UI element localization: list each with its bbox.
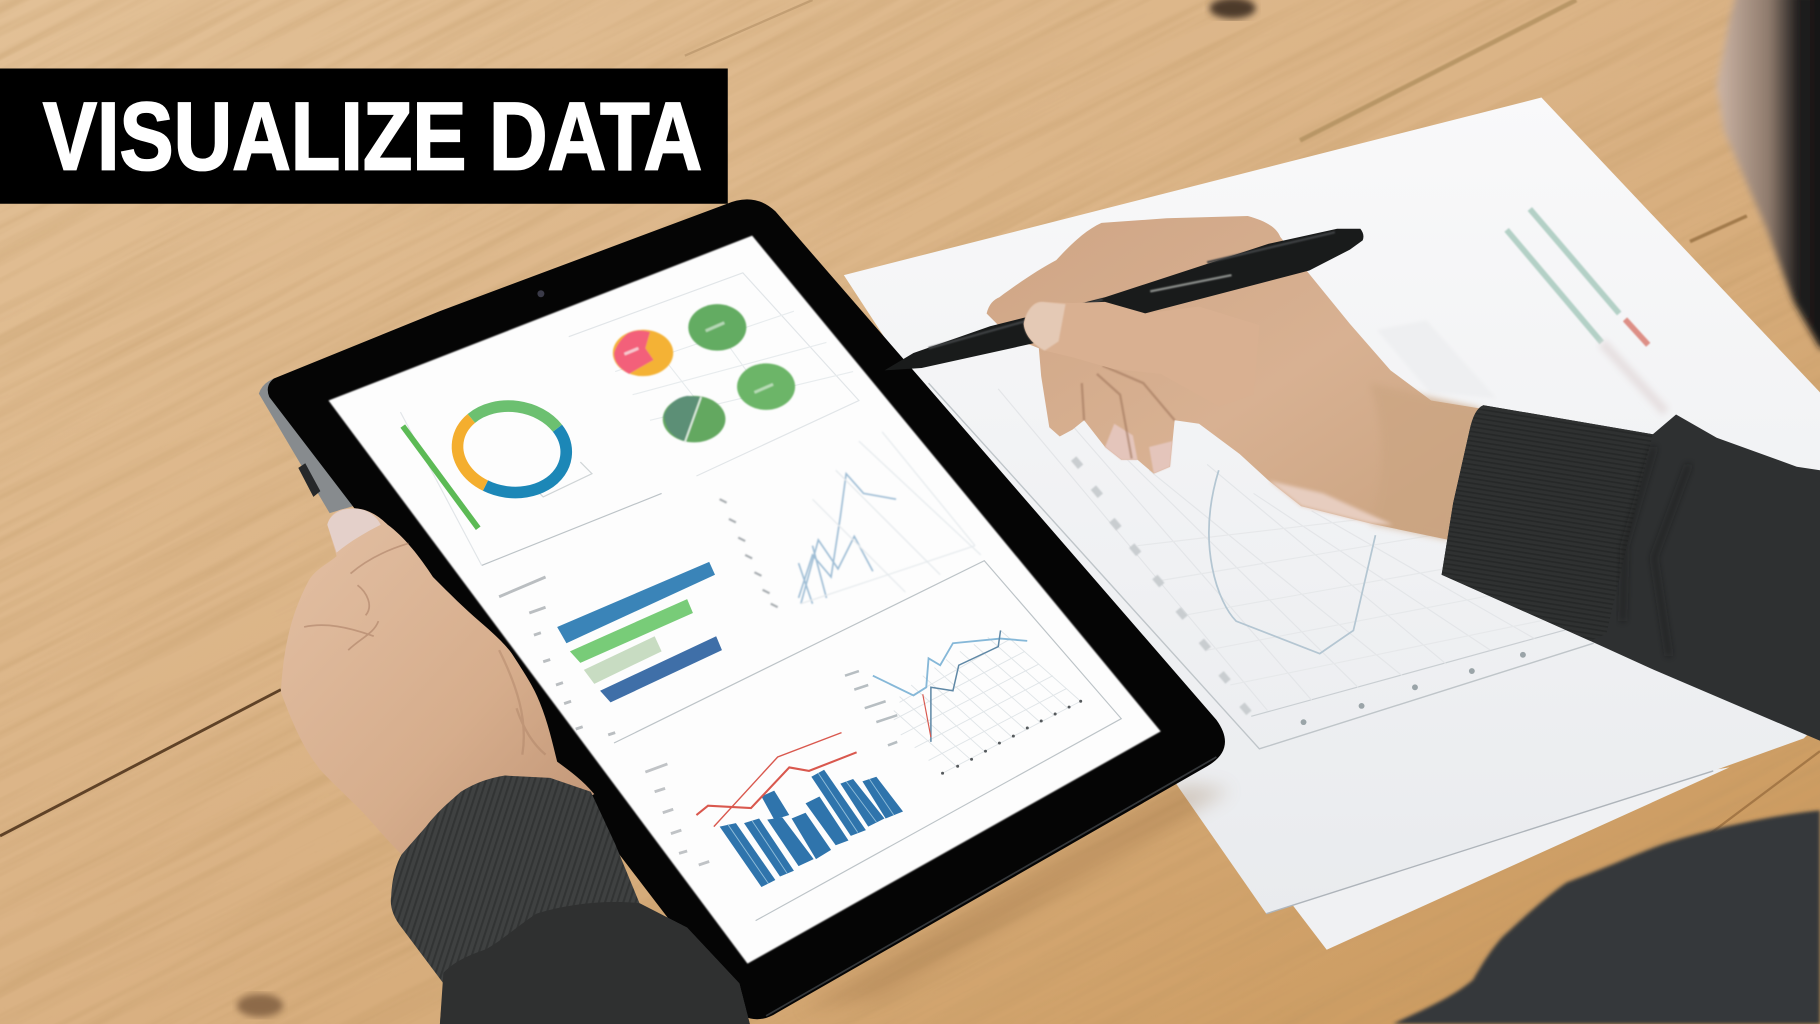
panel lines on screen: [482, 493, 1121, 921]
pie: green top: [688, 304, 746, 351]
chart on paper: [929, 383, 1594, 749]
ribbed cuff: [1442, 405, 1653, 641]
title banner: [0, 68, 728, 204]
right hand with pen: [884, 216, 1481, 540]
right sleeve: [1442, 405, 1820, 741]
pie: green right: [737, 363, 795, 410]
pen: [884, 229, 1363, 370]
horizontal bar chart: [499, 562, 722, 735]
camera: [537, 290, 544, 297]
pink fingertips: [1105, 424, 1172, 474]
donut chart: [452, 399, 572, 499]
top-right line chart: [720, 432, 981, 607]
side button: [298, 463, 320, 497]
left hand holding tablet: [281, 508, 594, 854]
shoulder, foreground: [1393, 810, 1820, 1024]
left sleeve: [391, 776, 750, 1024]
person's head, top right: [1717, 0, 1820, 348]
tablet body: [268, 199, 1225, 1019]
title: VISUALIZE DATA: [43, 83, 702, 191]
vertical green bar: [403, 426, 478, 528]
red trend lines: [696, 733, 857, 827]
paper stack: [844, 98, 1820, 950]
wrist tone: [1370, 383, 1481, 540]
tablet: [259, 199, 1225, 1019]
tablet screen: [328, 236, 1161, 964]
hand: [987, 216, 1481, 540]
thumb: [1024, 302, 1259, 406]
bottom column chart: [645, 764, 903, 887]
pie: red and orange: [613, 330, 673, 376]
tablet side edge: [259, 378, 353, 513]
under-hand highlight: [1269, 481, 1393, 525]
tablet shadow: [801, 784, 1230, 1010]
thumb nail: [327, 509, 381, 553]
pie: dark green split: [663, 396, 725, 442]
lower-right line chart: [845, 630, 1081, 773]
